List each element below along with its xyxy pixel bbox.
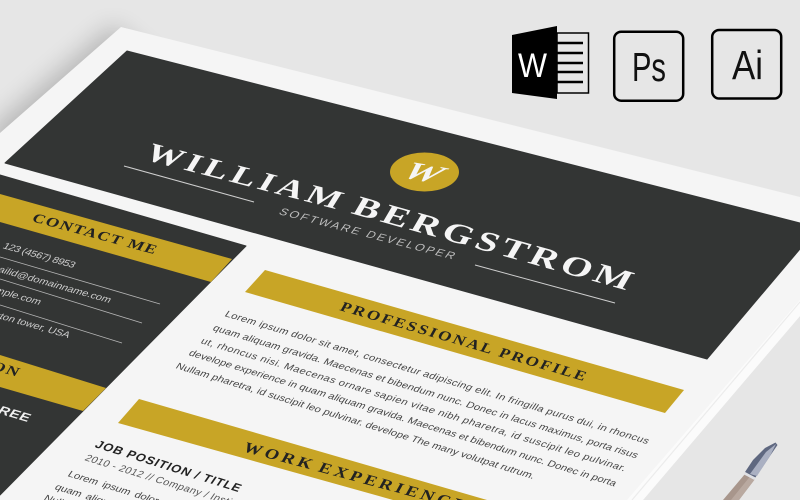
profile paragraph: Nullam pharetra, id suscipit leo pulvinar. develope The many volutpat rutrum. — [173, 362, 537, 481]
profile paragraph: Lorem ipsum dolor sit amet, consectetur adipiscing elit. In fringilla purus dui, in rhoncus — [222, 310, 651, 446]
name — [139, 138, 639, 296]
panel: header — [5, 51, 800, 359]
icon: Photoshop: Ps — [632, 44, 666, 90]
job title: SOFTWARE DEVELOPER — [276, 207, 457, 262]
contact heading: CONTACT ME — [29, 211, 160, 257]
pen — [723, 442, 778, 500]
icon: Word: W — [518, 47, 547, 85]
name: BERGSTROM — [347, 191, 639, 296]
page stack edge — [627, 300, 800, 500]
profile heading: PROFESSIONAL PROFILE — [337, 300, 589, 384]
profile paragraph: ut, rhoncus nisi. Maecenas ornare sapien vitae nibh pharetra, id suscipit leo pulvinar. — [198, 337, 628, 474]
panel: sidebar — [0, 175, 246, 495]
profile paragraph: quam aliquam gravida. Maecenas et bibendum nunc. Donec in lacus maximus, porta risus — [210, 324, 640, 461]
panel: professional profile — [173, 270, 684, 489]
page shadow — [0, 25, 200, 300]
icon: Word — [512, 26, 588, 99]
phone: 123 (4567) 8953 — [0, 242, 78, 270]
contact details — [0, 242, 113, 340]
profile paragraph: develope experience in quam aliquam gravida. Maecenas et bibendum nunc. Donec in porta — [186, 349, 619, 489]
monogram badge: W — [396, 157, 454, 189]
education band — [0, 334, 106, 411]
name rule right — [475, 265, 615, 303]
icon: Illustrator — [712, 30, 781, 98]
icon: Illustrator: Ai — [732, 42, 763, 88]
name rule left — [124, 166, 254, 202]
monogram badge — [390, 152, 459, 192]
profile band — [245, 270, 684, 413]
work band — [118, 399, 487, 500]
icon: Photoshop — [614, 32, 683, 101]
name: WILLIAM — [139, 138, 349, 215]
job title: JOB POSITION / TITLE — [92, 438, 244, 494]
contact band — [0, 194, 232, 282]
panel: work experience — [41, 399, 487, 500]
contact divider lines — [0, 257, 160, 343]
